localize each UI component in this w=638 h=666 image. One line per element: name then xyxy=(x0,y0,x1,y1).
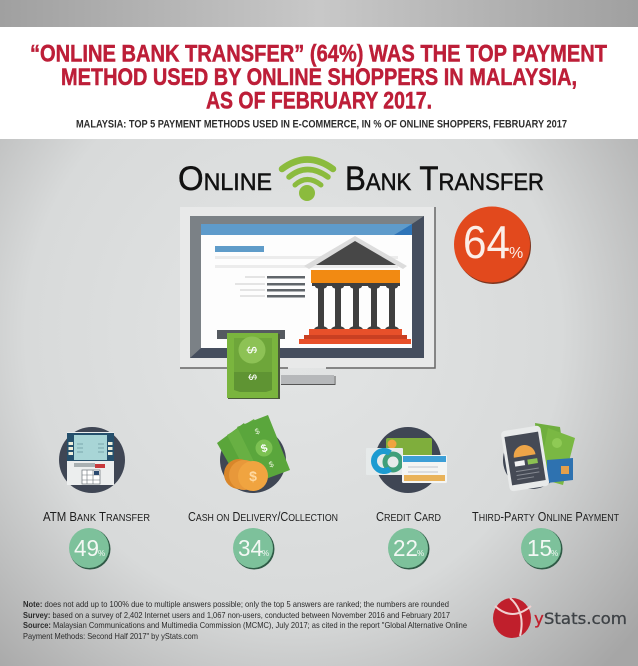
icon: banknote: $ xyxy=(246,374,258,380)
icon: ATM xyxy=(59,427,125,493)
badge: 22% xyxy=(388,528,430,570)
icon: cash and coins: $ xyxy=(254,426,261,436)
badge: 64%: % xyxy=(509,245,523,262)
badge: 15% xyxy=(521,528,562,570)
badge: 49%: % xyxy=(98,549,105,558)
footnotes: Survey: based on a survey of 2,402 Internet users and 1,067 non-users, conducted between November 2016 and February 2017 xyxy=(23,610,450,620)
label: cash on delivery: CASH ON DELIVERY/COLLECTION xyxy=(188,509,338,524)
label: ATM bank transfer: ATM BANK TRANSFER xyxy=(43,509,150,524)
label: third-party online payment: THIRD-PARTY ONLINE PAYMENT xyxy=(472,509,619,524)
footnotes: Payment Methods: Second Half 2017" by yStats.com xyxy=(23,631,198,641)
badge: 34% xyxy=(233,528,274,570)
badge: 22%: 22 xyxy=(393,535,418,561)
badge: 49% xyxy=(69,528,110,570)
heading: online bank transfer: ONLINE xyxy=(178,160,272,198)
icon: banknote: $ xyxy=(244,346,260,354)
icon: banknote xyxy=(227,333,280,399)
icon: cash and coins: $ xyxy=(259,442,269,456)
icon: cash and coins: $ xyxy=(249,468,257,484)
badge: 49%: 49 xyxy=(74,535,99,561)
badge: 64%: 64 xyxy=(463,216,510,268)
icon: wifi xyxy=(282,160,333,201)
icon: cash and coins xyxy=(217,415,290,493)
badge: 22%: % xyxy=(417,549,424,558)
icon: bank building xyxy=(299,236,411,344)
icon: mobile payment xyxy=(501,423,575,492)
badge: 34%: 34 xyxy=(238,535,263,561)
footnotes: Source: Malaysian Communications and Multimedia Commission (MCMC), July 2017; as cited in the report "Global Alternative Online xyxy=(23,620,467,630)
monitor xyxy=(180,207,435,399)
badge: 15%: 15 xyxy=(527,535,552,561)
badge: 34%: % xyxy=(262,549,269,558)
badge: 15%: % xyxy=(551,549,558,558)
browser window xyxy=(201,224,412,348)
title: AS OF FEBRUARY 2017. xyxy=(206,88,432,114)
footnotes xyxy=(23,599,467,641)
logo: yStats.com: yStats.com xyxy=(534,609,627,628)
header panel xyxy=(0,27,638,139)
footnotes: Note: does not add up to 100% due to multiple answers possible; only the top 5 answers are ranked; the numbers are rounded xyxy=(23,599,449,609)
icon: cash and coins: $ xyxy=(268,459,275,469)
heading: online bank transfer xyxy=(178,160,544,198)
title xyxy=(30,40,607,114)
icon: credit cards xyxy=(366,427,447,493)
label: credit card: CREDIT CARD xyxy=(376,509,441,524)
logo: yStats.com xyxy=(493,598,627,638)
heading: online bank transfer: BANK TRANSFER xyxy=(345,160,544,198)
badge: 64% xyxy=(454,206,531,284)
